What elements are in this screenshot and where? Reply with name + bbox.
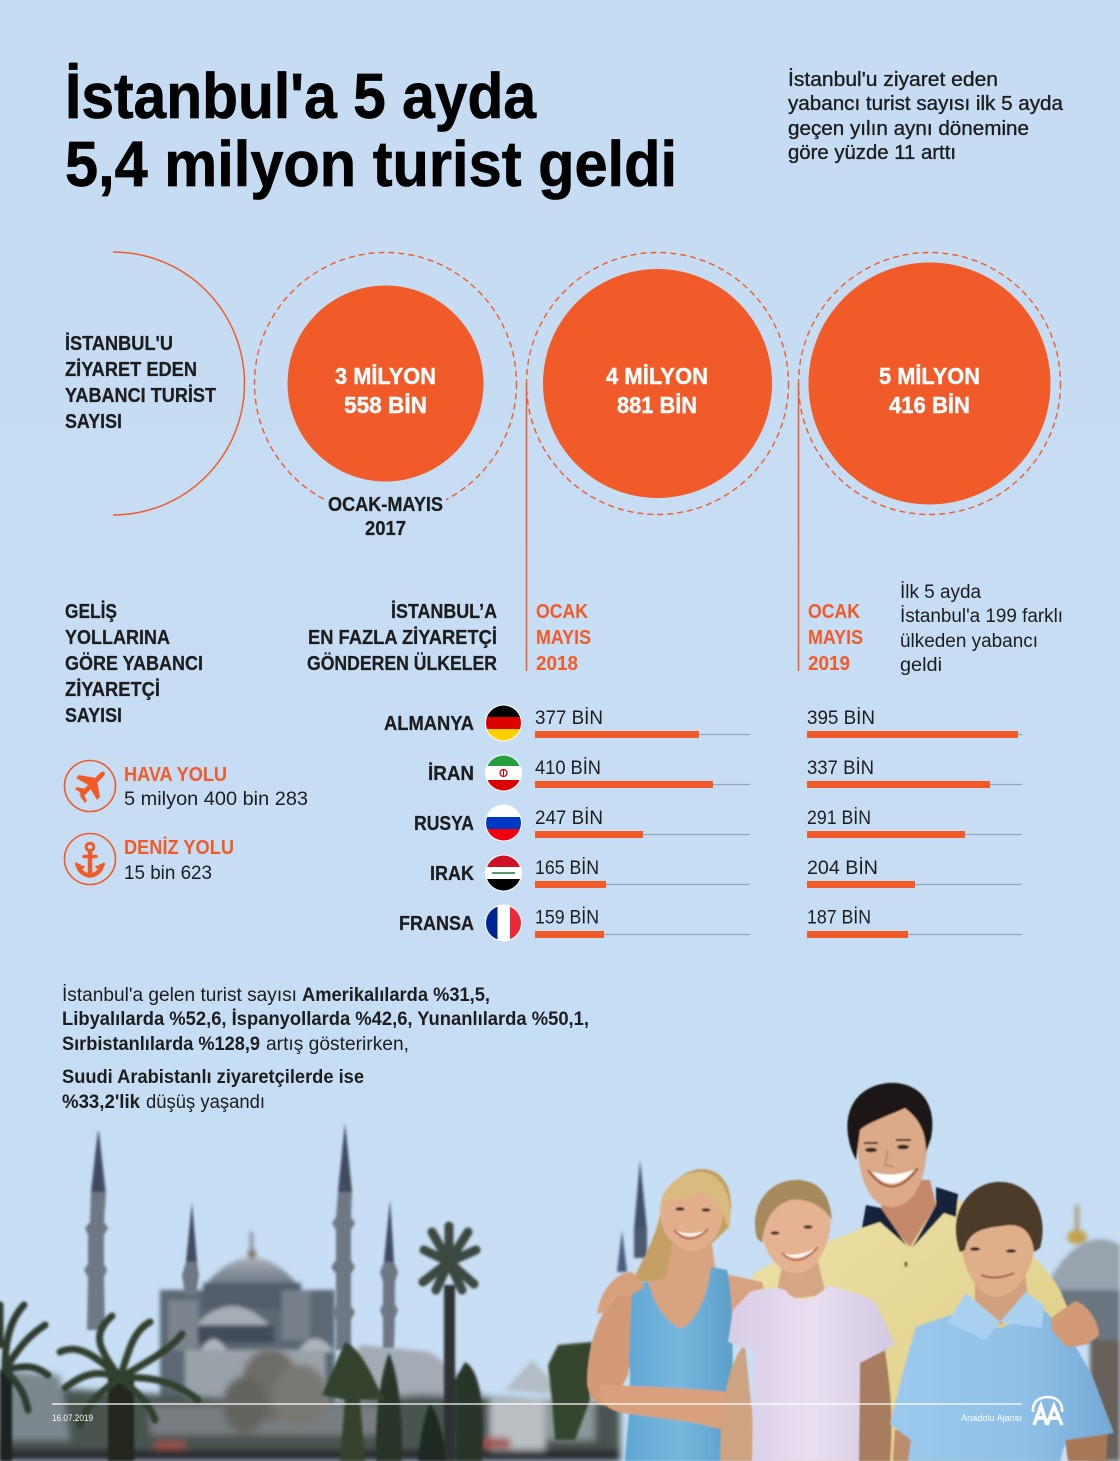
row: İran: 410 BİN: [535, 756, 601, 779]
heading: top source countries: EN FAZLA ZİYARETÇİ: [308, 626, 497, 649]
bubble: 2018 total: [526, 252, 788, 671]
note: 199 countries: İlk 5 ayda: [900, 582, 981, 603]
route: air: [64, 760, 308, 812]
row: Almanya: 377 BİN: [535, 706, 603, 729]
note: 199 countries: İstanbul'a 199 farklı: [900, 606, 1063, 627]
footer: Anadolu Ajansı: [961, 1413, 1022, 1423]
row: Rusya: 291 BİN: [807, 806, 871, 829]
intro text: İstanbul'u ziyaret eden: [788, 68, 998, 91]
heading: arrivals by route: [65, 600, 203, 727]
row: Fransa: [399, 904, 1022, 942]
route: air: HAVA YOLU: [124, 764, 227, 786]
text block: nationality changes: Suudi Arabistanlı ziyaretçilerde ise: [62, 1067, 364, 1088]
flag: France: [485, 904, 522, 942]
panel: visitor totals heading with arc: SAYISI: [65, 411, 122, 433]
note: 199 countries: ülkeden yabancı: [900, 631, 1038, 652]
bubble: 2017 total: 3 MİLYON: [335, 363, 436, 389]
column heading: 2018: MAYIS: [536, 627, 591, 649]
heading: arrivals by route: ZİYARETÇİ: [65, 678, 160, 701]
row: Irak: IRAK: [430, 863, 474, 885]
icon: AA logo: [1033, 1397, 1062, 1425]
footer: [52, 1397, 1062, 1425]
route: air: 5 milyon 400 bin 283: [124, 789, 308, 810]
heading: arrivals by route: GELİŞ: [65, 600, 117, 623]
note: 199 countries: geldi: [900, 655, 942, 676]
mother: [587, 1169, 766, 1461]
text block: nationality changes: %33,2'lik: [62, 1092, 140, 1113]
row: İran: [428, 754, 1022, 792]
bubble: 2018 total: 881 BİN: [617, 392, 697, 418]
father: [752, 1083, 1077, 1461]
icon: anchor: [76, 843, 104, 876]
row: Fransa: 187 BİN: [807, 906, 871, 928]
title: [65, 60, 677, 200]
bubble: 2017 total: 558 BİN: [344, 392, 427, 418]
bubble: 2017 total: [254, 252, 516, 540]
route: sea: [64, 834, 234, 884]
column heading: 2019: 2019: [808, 653, 850, 675]
flag: Iran: [485, 754, 522, 792]
heading: top source countries: [307, 600, 497, 675]
minarets: [84, 1123, 647, 1350]
icon: plane: [75, 772, 105, 803]
row: Irak: 165 BİN: [535, 856, 599, 879]
panel: visitor totals heading with arc: [65, 252, 244, 515]
ground and tree mass: [0, 1349, 620, 1461]
row: Irak: [430, 854, 1022, 892]
column heading: 2019: [808, 601, 863, 675]
row: İran: İRAN: [428, 762, 474, 785]
boy: [890, 1182, 1114, 1461]
column heading: 2018: OCAK: [536, 601, 588, 623]
palms and trees: [0, 1226, 592, 1461]
row: Almanya: 395 BİN: [807, 706, 875, 729]
heading: top source countries: İSTANBUL’A: [391, 600, 497, 623]
row: Irak: 204 BİN: [807, 856, 878, 879]
girl: [720, 1180, 895, 1461]
row: Rusya: [414, 804, 1022, 842]
route: sea: 15 bin 623: [124, 863, 212, 884]
intro text: geçen yılın aynı dönemine: [788, 118, 1029, 140]
bubble: 2017 total: OCAK-MAYIS: [328, 494, 443, 516]
bubble: 2019 total: [798, 252, 1060, 671]
right dome in background: [1043, 1205, 1120, 1461]
note: 199 countries: [900, 582, 1063, 676]
row: Rusya: 247 BİN: [535, 806, 603, 829]
title: 5,4 milyon turist geldi: [65, 128, 677, 200]
heading: arrivals by route: GÖRE YABANCI: [65, 652, 203, 675]
intro text: [788, 68, 1064, 164]
column heading: 2019: OCAK: [808, 601, 860, 623]
heading: arrivals by route: YOLLARINA: [65, 627, 170, 649]
text block: nationality changes: düşüş yaşandı: [146, 1092, 265, 1113]
text block: nationality changes: İstanbul'a gelen turist sayısı: [62, 985, 297, 1006]
bubble: 2017 total: 2017: [365, 518, 406, 540]
heading: top source countries: GÖNDEREN ÜLKELER: [307, 652, 497, 675]
column heading: 2018: [536, 601, 591, 675]
intro text: yabancı turist sayısı ilk 5 ayda: [788, 93, 1064, 115]
footer: 16.07.2019: [52, 1413, 93, 1423]
row: Fransa: FRANSA: [399, 913, 474, 935]
row: Almanya: [384, 704, 1022, 742]
column heading: 2019: MAYIS: [808, 627, 863, 649]
bubble: 2019 total: 5 MİLYON: [879, 363, 980, 389]
flag: Germany: [485, 704, 522, 742]
heading: arrivals by route: SAYISI: [65, 705, 122, 727]
route: sea: DENİZ YOLU: [124, 836, 234, 859]
row: İran: 337 BİN: [807, 756, 874, 779]
bubble: 2019 total: 416 BİN: [889, 392, 970, 418]
bubble: 2018 total: 4 MİLYON: [606, 363, 708, 389]
text block: nationality changes: Amerikalılarda %31,5,: [302, 985, 490, 1006]
column heading: 2018: 2018: [536, 653, 578, 675]
text block: nationality changes: Sırbistanlılarda %128,9: [62, 1034, 260, 1055]
panel: visitor totals heading with arc: ZİYARET EDEN: [65, 358, 197, 381]
title: İstanbul'a 5 ayda: [65, 60, 536, 132]
row: Almanya: ALMANYA: [384, 713, 474, 735]
flag: Iraq: [485, 854, 522, 892]
photo: family: [587, 1083, 1114, 1461]
text block: nationality changes: Libyalılarda %52,6, İspanyollarda %42,6, Yunanlılarda %50,1,: [62, 1009, 589, 1030]
panel: visitor totals heading with arc: YABANCI TURİST: [65, 384, 216, 407]
flag: Russia: [485, 804, 522, 842]
background photo: blue mosque skyline: [0, 1123, 1120, 1461]
panel: visitor totals heading with arc: İSTANBUL'U: [65, 332, 173, 355]
text block: nationality changes: artış gösterirken,: [266, 1034, 409, 1055]
row: Fransa: 159 BİN: [535, 906, 599, 928]
intro text: göre yüzde 11 arttı: [788, 142, 956, 164]
hands: [597, 1272, 1099, 1347]
text block: nationality changes: [62, 985, 589, 1113]
row: Rusya: RUSYA: [414, 813, 474, 835]
